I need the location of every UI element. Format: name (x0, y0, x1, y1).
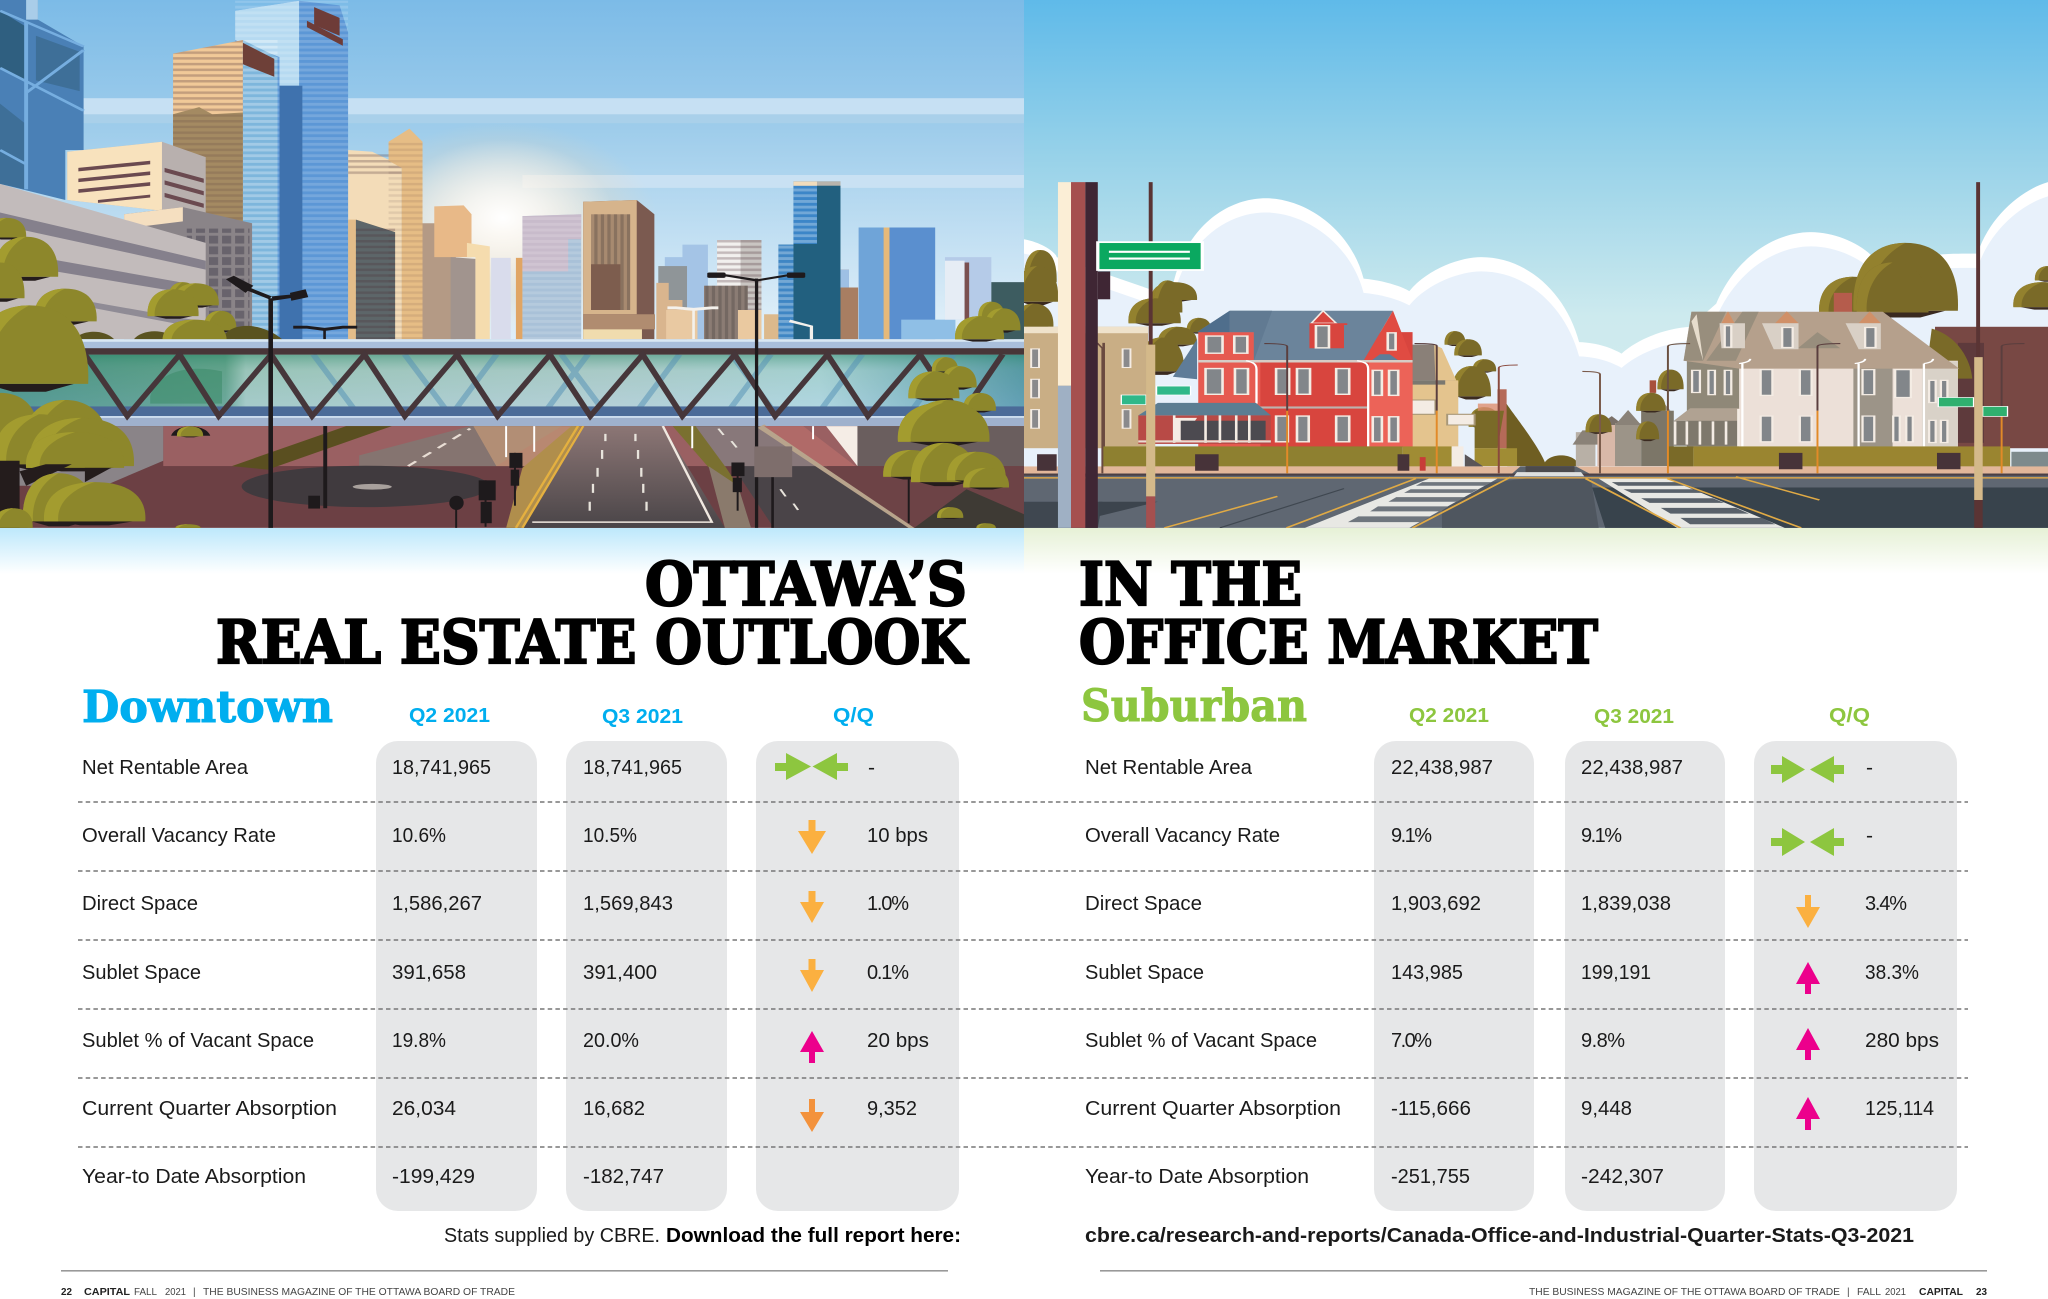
row labels suburban: Current Quarter Absorption (1085, 1098, 1341, 1120)
values Q2 downtown (392, 757, 491, 1188)
icon: no change arrows, vacancy suburban (1771, 828, 1844, 856)
values Q2 downtown: 1,586,267 (392, 893, 482, 915)
column headers suburban (1409, 705, 1870, 728)
row labels downtown: Direct Space (82, 893, 198, 915)
hedges, sidewalk, road (1024, 446, 2048, 528)
footer left (61, 1287, 515, 1298)
trees, left foreground (0, 218, 201, 530)
footer left: 22 (61, 1287, 72, 1298)
source note left: Download the full report here: (666, 1225, 961, 1247)
title right: OFFICE MARKET (1079, 608, 1598, 678)
row labels suburban: Net Rentable Area (1085, 757, 1253, 779)
source link right: cbre.ca/research-and-reports/Canada-Office-and-Industrial-Quarter-Stats-Q3-2021 (1085, 1225, 1914, 1247)
source note left: Stats supplied by CBRE. (444, 1225, 660, 1247)
values Q3 downtown: 20.0% (583, 1030, 639, 1052)
values Q3 downtown: 391,400 (583, 962, 657, 984)
column headers suburban: Q2 2021 (1409, 705, 1489, 727)
values Q/Q suburban: - (1866, 825, 1873, 847)
icon: down arrow vacancy downtown (798, 820, 826, 854)
footer left: 2021 (165, 1287, 186, 1298)
panel: Q3 column downtown (566, 741, 727, 1211)
values Q3 suburban: 22,438,987 (1581, 757, 1683, 779)
values Q3 downtown: -182,747 (583, 1166, 664, 1188)
values Q/Q downtown: 0.1% (867, 962, 909, 984)
footer left: | (193, 1287, 196, 1298)
values Q2 suburban: -115,666 (1391, 1098, 1471, 1120)
main pole with green street sign (1058, 182, 1983, 528)
values Q/Q suburban: 280 bps (1865, 1030, 1939, 1052)
icon: up arrow sublet percent suburban (1796, 1028, 1820, 1060)
values Q2 downtown: 391,658 (392, 962, 466, 984)
row labels downtown: Net Rentable Area (82, 757, 249, 779)
values Q2 downtown: -199,429 (392, 1166, 475, 1188)
row labels suburban: Sublet % of Vacant Space (1085, 1030, 1317, 1052)
footer right: THE BUSINESS MAGAZINE OF THE OTTAWA BOARD OF TRADE (1529, 1287, 1840, 1298)
footer rule left (61, 1270, 948, 1272)
values Q2 suburban: 7.0% (1391, 1030, 1432, 1052)
values Q3 suburban: 9.1% (1581, 825, 1622, 847)
heading: Suburban: Suburban (1081, 681, 1307, 732)
footer right: FALL (1857, 1287, 1881, 1298)
yellow side house (1412, 344, 1476, 448)
values Q/Q downtown: 1.0% (867, 893, 909, 915)
lamp posts behind bridge (293, 306, 813, 339)
values Q/Q suburban: 3.4% (1865, 893, 1907, 915)
values Q2 suburban: 1,903,692 (1391, 893, 1481, 915)
icon: no change arrows, net rentable suburban (1771, 756, 1844, 783)
distant houses centre (1573, 370, 1684, 466)
title left (216, 550, 969, 678)
panel: Q/Q column downtown (756, 741, 959, 1211)
street furniture (1037, 446, 1960, 471)
column headers downtown: Q/Q (833, 705, 874, 727)
row labels suburban: Year-to Date Absorption (1085, 1166, 1309, 1188)
values Q/Q suburban (1865, 757, 1939, 1120)
colour fade, left page (0, 528, 1024, 574)
values Q/Q downtown (867, 757, 929, 1120)
far tree under bridge (171, 426, 210, 437)
brick building (1925, 327, 2048, 448)
grey house windows (1692, 326, 1947, 442)
trees, right foreground (883, 302, 1020, 529)
values Q2 suburban: -251,755 (1391, 1166, 1470, 1188)
small street signs (1121, 386, 2008, 416)
source note left (444, 1225, 961, 1247)
grey house (1674, 311, 1959, 448)
row labels downtown: Sublet % of Vacant Space (82, 1030, 314, 1052)
title right: IN THE (1079, 550, 1302, 620)
values Q3 suburban: -242,307 (1581, 1166, 1664, 1188)
row labels downtown: Sublet Space (82, 962, 201, 984)
icon: down arrow sublet downtown (800, 959, 824, 992)
footer right: | (1847, 1287, 1850, 1298)
row labels downtown (82, 757, 337, 1188)
trees beyond red house (1445, 331, 1579, 466)
icon: no change arrows, net rentable downtown (775, 753, 848, 780)
central towers (348, 129, 655, 339)
background trees, left (1014, 250, 1211, 405)
secondary lamps (1097, 343, 2024, 473)
beige apartment (1024, 327, 1148, 475)
icon: down arrow direct downtown (800, 891, 824, 923)
row labels suburban (1085, 757, 1341, 1188)
heading: Downtown: Downtown (82, 682, 333, 733)
values Q3 downtown (583, 757, 682, 1188)
values Q/Q downtown: - (868, 757, 875, 779)
row labels suburban: Overall Vacancy Rate (1085, 825, 1280, 847)
street lamps, signals (226, 272, 933, 528)
icon: up arrow sublet suburban (1796, 962, 1820, 994)
footer right: 2021 (1885, 1287, 1906, 1298)
footer left: THE BUSINESS MAGAZINE OF THE OTTAWA BOARD OF TRADE (203, 1287, 515, 1298)
title left: OTTAWA’S (645, 550, 967, 620)
values Q2 suburban: 22,438,987 (1391, 757, 1493, 779)
row labels downtown: Overall Vacancy Rate (82, 825, 276, 847)
values Q2 suburban: 143,985 (1391, 962, 1463, 984)
panel: Q2 column suburban (1374, 741, 1534, 1211)
column headers downtown (409, 705, 874, 728)
cream low building (67, 142, 206, 214)
values Q/Q suburban: 125,114 (1865, 1098, 1934, 1120)
values Q/Q downtown: 10 bps (867, 825, 928, 847)
footer right (1529, 1287, 1987, 1298)
grey office block (0, 184, 252, 339)
left trees behind bridge (80, 282, 282, 340)
footer right: 23 (1976, 1287, 1987, 1298)
row labels suburban: Direct Space (1085, 893, 1202, 915)
sign on road (754, 446, 792, 477)
values Q3 downtown: 18,741,965 (583, 757, 682, 779)
values Q3 downtown: 16,682 (583, 1098, 645, 1120)
values Q/Q downtown: 20 bps (867, 1030, 929, 1052)
footer rule right (1100, 1270, 1987, 1272)
tan tower (173, 40, 278, 339)
values Q2 downtown: 26,034 (392, 1098, 456, 1120)
illustration: suburban street (1014, 0, 2048, 528)
column headers downtown: Q2 2021 (409, 705, 490, 727)
footer left: FALL (134, 1287, 157, 1298)
panel: Q3 column suburban (1565, 741, 1725, 1211)
street level under bridge (0, 426, 1024, 528)
icon: down arrow absorption downtown (800, 1099, 824, 1132)
row labels downtown: Year-to Date Absorption (82, 1166, 306, 1188)
values Q2 downtown: 10.6% (392, 825, 446, 847)
title right (1079, 550, 1598, 678)
clouds (1024, 182, 2048, 471)
main glass tower (235, 1, 348, 339)
values Q3 suburban (1581, 757, 1683, 1188)
far skyline towers, right (656, 181, 1024, 339)
values Q3 downtown: 1,569,843 (583, 893, 673, 915)
illustration: downtown skyline (0, 0, 1024, 530)
column headers suburban: Q/Q (1829, 705, 1870, 727)
icon: up arrow sublet percent downtown (800, 1031, 824, 1063)
panel: Q2 column downtown (376, 741, 537, 1211)
column headers downtown: Q3 2021 (602, 706, 683, 728)
red house windows (1206, 326, 1398, 442)
values Q3 suburban: 9.8% (1581, 1030, 1625, 1052)
values Q2 suburban (1391, 757, 1493, 1188)
grey house porch (1674, 408, 1739, 446)
row labels suburban: Sublet Space (1085, 962, 1204, 984)
footer right: CAPITAL (1919, 1287, 1963, 1298)
values Q3 suburban: 9,448 (1581, 1098, 1632, 1120)
red house porch (1138, 403, 1271, 444)
values Q2 suburban: 9.1% (1391, 825, 1432, 847)
values Q3 downtown: 10.5% (583, 825, 637, 847)
values Q2 downtown: 18,741,965 (392, 757, 491, 779)
icon: down arrow direct suburban (1796, 895, 1820, 928)
values Q/Q suburban: - (1866, 757, 1873, 779)
row labels downtown: Current Quarter Absorption (82, 1098, 337, 1120)
values Q3 suburban: 1,839,038 (1581, 893, 1671, 915)
values Q/Q downtown: 9,352 (867, 1098, 917, 1120)
values Q/Q suburban: 38.3% (1865, 962, 1919, 984)
far-left blue tower (0, 0, 84, 200)
red house (1138, 311, 1413, 447)
title left: REAL ESTATE OUTLOOK (216, 608, 969, 678)
values Q2 downtown: 19.8% (392, 1030, 446, 1052)
skybridge (0, 339, 1024, 426)
column headers suburban: Q3 2021 (1594, 706, 1674, 728)
large tree behind grey house (1819, 243, 2048, 318)
values Q3 suburban: 199,191 (1581, 962, 1651, 984)
colour fade, right page (1024, 528, 2048, 574)
panel: Q/Q column suburban (1754, 741, 1957, 1211)
icon: up arrow absorption suburban (1796, 1097, 1820, 1130)
footer left: CAPITAL (84, 1287, 130, 1298)
